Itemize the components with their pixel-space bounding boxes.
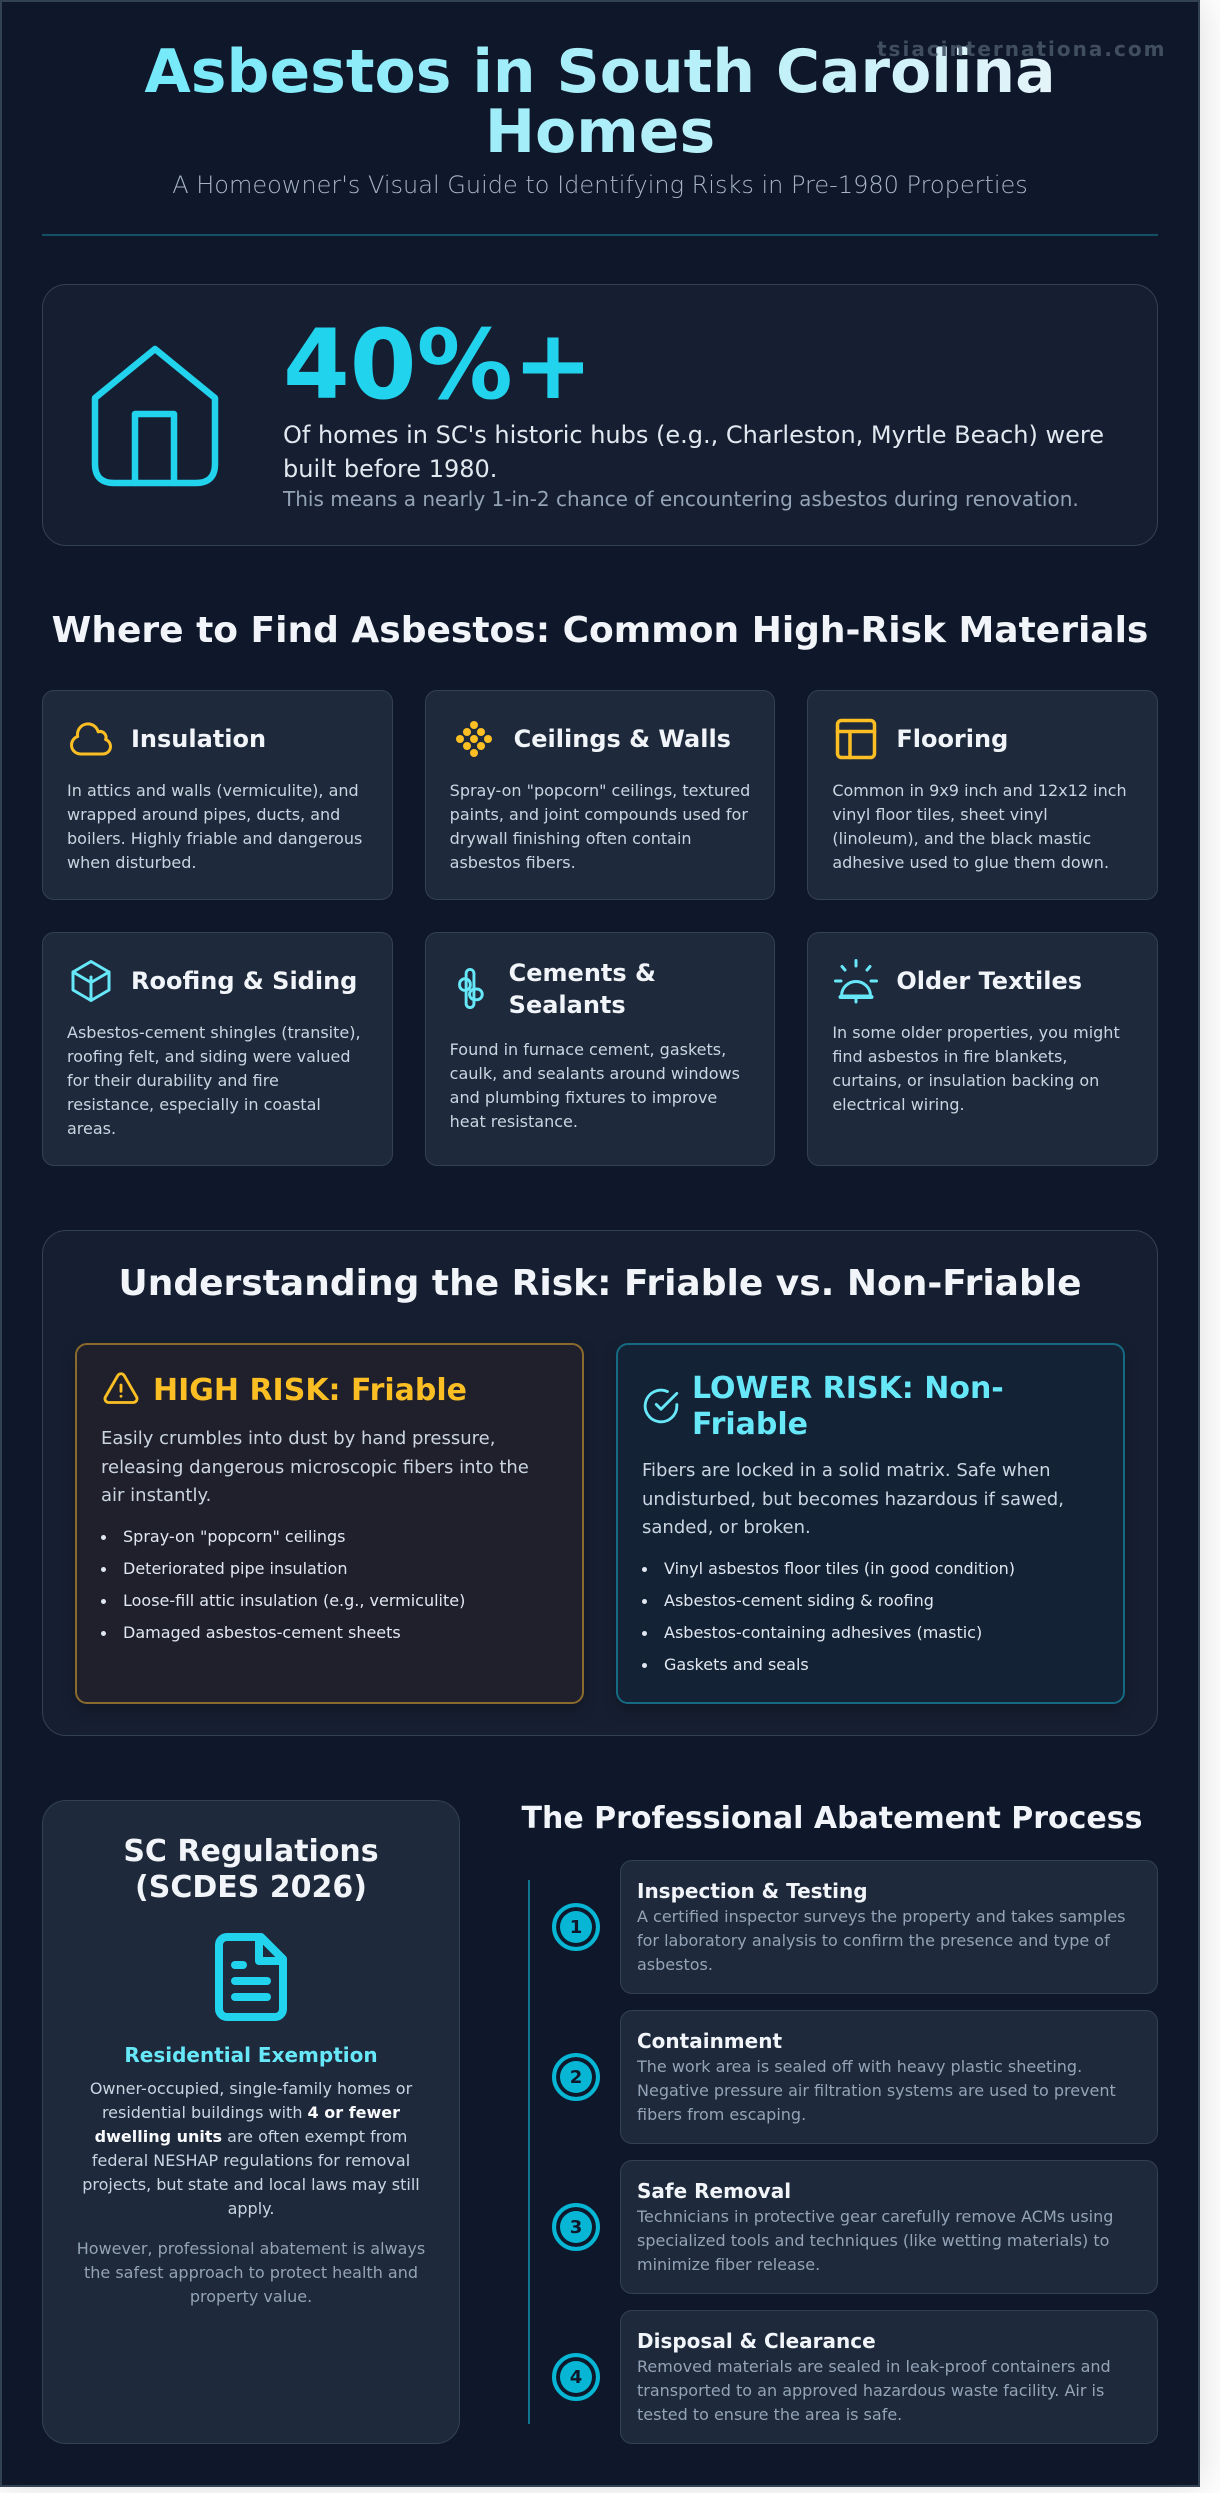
friable list [101, 1526, 465, 1642]
step 1 number [552, 1903, 600, 1951]
hero note: This means a nearly 1-in-2 chance of encountering asbestos during renovation. [283, 487, 1079, 511]
non-friable list: Asbestos-containing adhesives (mastic) [664, 1622, 982, 1642]
exemption text: apply. [228, 2199, 274, 2218]
exemption text [82, 2079, 420, 2218]
exemption text: dwelling units are often exempt from [95, 2127, 407, 2146]
panel: high risk: HIGH RISK: Friable [153, 1372, 467, 1408]
icon: document [215, 1933, 287, 2021]
card: insulation [42, 690, 393, 900]
subtitle: A Homeowner's Visual Guide to Identifying Risks in Pre-1980 Properties [172, 171, 1028, 199]
card: flooring [807, 690, 1158, 900]
step 3 number: 3 [570, 2216, 582, 2238]
step 4 number: 4 [570, 2366, 582, 2388]
exemption text: projects, but state and local laws may still [82, 2175, 420, 2194]
card: flooring: Common in 9x9 inch and 12x12 inch vinyl floor tiles, sheet vinyl (linoleum), and the black mastic adhesive used to glue them down. [832, 781, 1127, 872]
step 2 number [552, 2053, 600, 2101]
icon: dome with rays [834, 959, 878, 1004]
friable list: Damaged asbestos-cement sheets [123, 1622, 401, 1642]
step 2: Negative pressure air filtration systems are used to prevent [637, 2081, 1116, 2100]
icon: cube [71, 960, 111, 1002]
non-friable list: Vinyl asbestos floor tiles (in good condition) [664, 1558, 1015, 1578]
card: cements and sealants: Found in furnace cement, gaskets, caulk, and sealants around windows and plumbing fixtures to improve heat resistance. [450, 1040, 740, 1131]
step 3: Safe Removal [637, 2179, 791, 2203]
step 1: A certified inspector surveys the property and takes samples [637, 1907, 1126, 1926]
panel: SC regulations [42, 1800, 460, 2444]
hero text [283, 421, 1104, 483]
card: insulation: Insulation [131, 725, 266, 753]
step 4: Removed materials are sealed in leak-proof containers and [637, 2357, 1111, 2376]
icon: dots [456, 721, 492, 757]
non-friable list: Gaskets and seals [664, 1654, 809, 1674]
icon: tiles [836, 718, 876, 760]
card: older textiles: In some older properties, you might find asbestos in fire blankets, curtains, or insulation backing on electrical wiring. [832, 1023, 1120, 1114]
step 2 number: 2 [570, 2066, 582, 2088]
watermark: tsiacinternationa.com [877, 36, 1166, 60]
big number: 40%+ [283, 309, 593, 421]
abatement note: However, professional abatement is always [77, 2239, 425, 2258]
step 1 [620, 1860, 1158, 1994]
step 2 [620, 2010, 1158, 2144]
step 1: for laboratory analysis to confirm the presence and type of [637, 1931, 1110, 1950]
non-friable list [642, 1558, 1015, 1674]
title: Homes [485, 97, 715, 167]
panel: lower risk [616, 1343, 1125, 1704]
exemption text: Owner-occupied, single-family homes or [90, 2079, 412, 2098]
card: ceilings and walls [425, 690, 775, 900]
abatement note: the safest approach to protect health and [84, 2263, 418, 2282]
icon: sealant links [458, 968, 484, 1009]
step 1: Inspection & Testing [637, 1879, 868, 1903]
hero text: Of homes in SC's historic hubs (e.g., Charleston, Myrtle Beach) were [283, 421, 1104, 449]
heading: where to find: Where to Find Asbestos: Common High-Risk Materials [52, 610, 1148, 650]
panel: friable vs non-friable [42, 1230, 1158, 1736]
step 3: Technicians in protective gear carefully remove ACMs using [637, 2207, 1113, 2226]
card: older textiles: Older Textiles [896, 967, 1082, 995]
card: roofing and siding [42, 932, 393, 1166]
step 3 number [552, 2203, 600, 2251]
step 2: fibers from escaping. [637, 2105, 806, 2124]
non-friable description: Fibers are locked in a solid matrix. Safe when undisturbed, but becomes hazardous if sawed, sanded, or broken. [642, 1460, 1064, 1538]
step 2: The work area is sealed off with heavy plastic sheeting. [637, 2057, 1082, 2076]
exemption text: residential buildings with 4 or fewer [102, 2103, 400, 2122]
exemption text: federal NESHAP regulations for removal [92, 2151, 410, 2170]
icon: cloud [70, 722, 112, 756]
heading: understanding the risk: Understanding the Risk: Friable vs. Non-Friable [118, 1262, 1082, 1304]
icon: check circle [644, 1388, 678, 1424]
abatement note [77, 2239, 425, 2306]
step 1: asbestos. [637, 1955, 713, 1974]
panel: high risk [75, 1343, 584, 1704]
icon: warning triangle [104, 1372, 138, 1404]
regulations heading: (SCDES 2026) [135, 1870, 367, 1905]
hero text: built before 1980. [283, 455, 497, 483]
card: insulation: In attics and walls (vermiculite), and wrapped around pipes, ducts, and boilers. Highly friable and dangerous when disturbed. [67, 781, 362, 872]
step 3: minimize fiber release. [637, 2255, 820, 2274]
panel: lower risk: LOWER RISK: Non-Friable [692, 1370, 1004, 1442]
step 4 number [552, 2353, 600, 2401]
step 3: specialized tools and techniques (like wetting materials) to [637, 2231, 1109, 2250]
heading: abatement process: The Professional Abatement Process [522, 1800, 1142, 1836]
step 2: Containment [637, 2029, 782, 2053]
title: Asbestos in South Carolina [144, 37, 1056, 107]
regulations heading: SC Regulations [123, 1834, 379, 1869]
card: roofing and siding: Asbestos-cement shingles (transite), roofing felt, and siding were valued for their durability and fire resistance, especially in coastal areas. [67, 1023, 361, 1138]
regulations heading [123, 1834, 379, 1905]
step 1 number: 1 [570, 1916, 582, 1938]
abatement note: property value. [190, 2287, 312, 2306]
friable list: Deteriorated pipe insulation [123, 1558, 347, 1578]
friable list: Loose-fill attic insulation (e.g., vermiculite) [123, 1590, 465, 1610]
exemption heading: Residential Exemption [124, 2043, 378, 2067]
step 3 [620, 2160, 1158, 2294]
panel: hero statistic [42, 284, 1158, 546]
friable list: Spray-on "popcorn" ceilings [123, 1526, 346, 1546]
step 4 [620, 2310, 1158, 2444]
title [42, 42, 1158, 162]
non-friable list: Asbestos-cement siding & roofing [664, 1590, 934, 1610]
icon: house [92, 346, 218, 486]
card: cements and sealants: Cements & Sealants [509, 959, 656, 1019]
card: roofing and siding: Roofing & Siding [131, 967, 357, 995]
step 4: Disposal & Clearance [637, 2329, 876, 2353]
card: flooring: Flooring [896, 725, 1008, 753]
step 4: tested to ensure the area is safe. [637, 2405, 902, 2424]
card: cements and sealants [425, 932, 775, 1166]
step 4: transported to an approved hazardous waste facility. Air is [637, 2381, 1104, 2400]
card: ceilings and walls: Ceilings & Walls [514, 725, 731, 753]
friable description: Easily crumbles into dust by hand pressure, releasing dangerous microscopic fibers into the air instantly. [101, 1428, 529, 1506]
card: ceilings and walls: Spray-on "popcorn" ceilings, textured paints, and joint compounds used for drywall finishing often contain asbestos fibers. [450, 781, 750, 872]
card: older textiles [807, 932, 1158, 1166]
